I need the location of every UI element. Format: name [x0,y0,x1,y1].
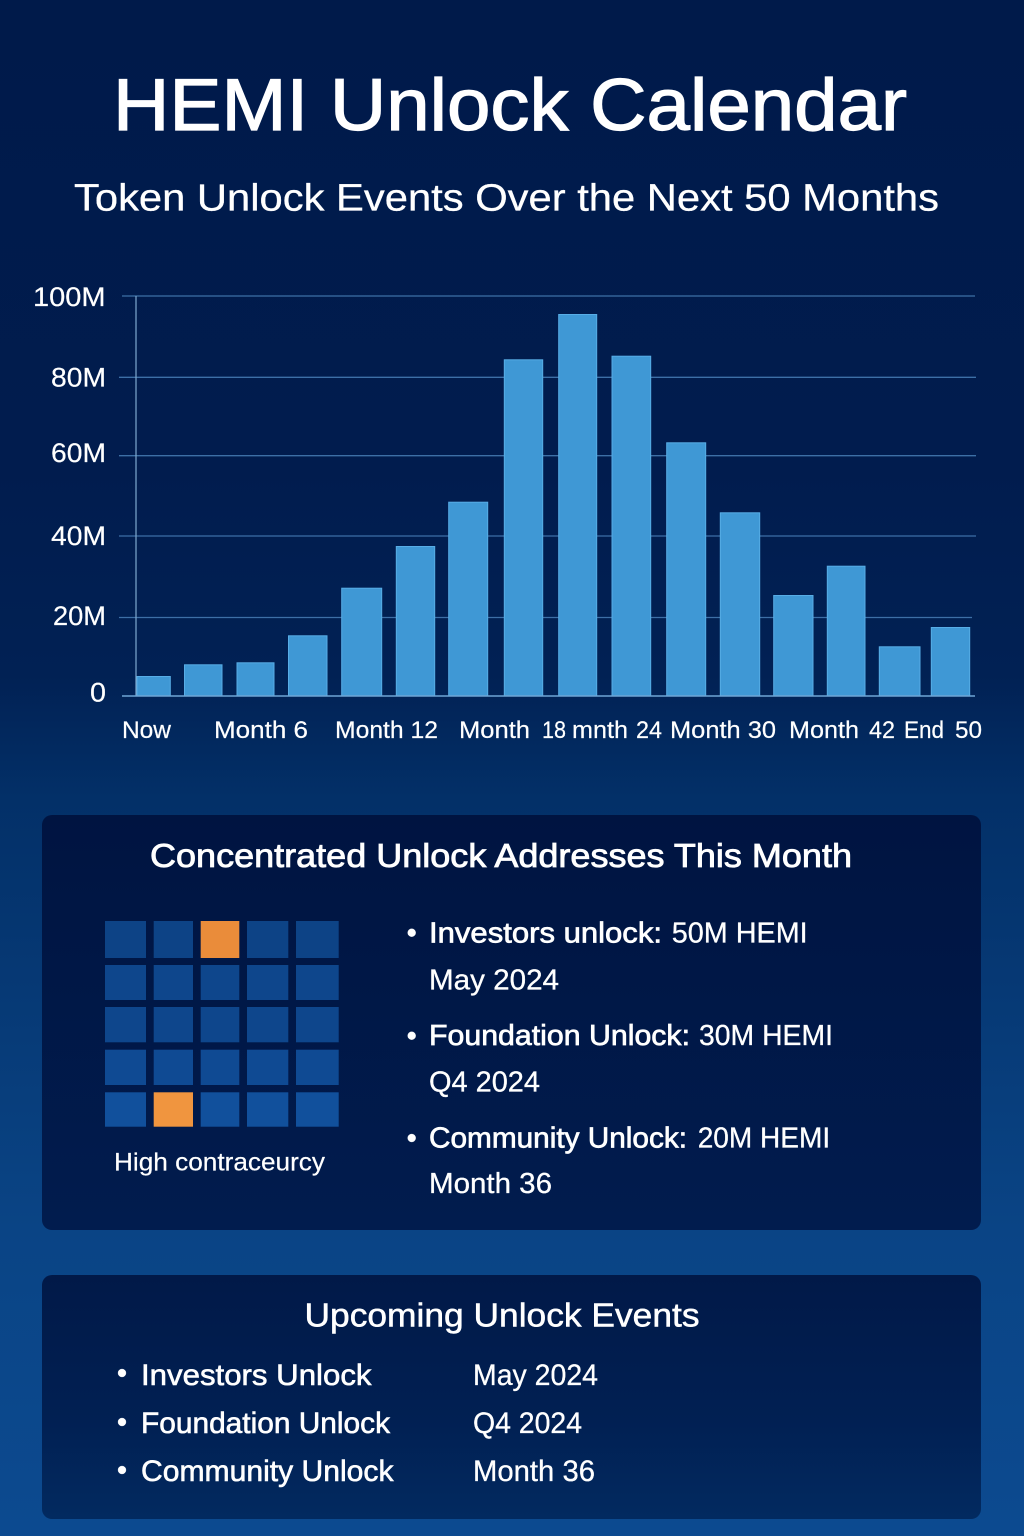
x axis labels: 50 [955,717,982,744]
grid caption: High contraceurcy [114,1149,326,1177]
events list: Month 36 [473,1455,595,1488]
x axis labels: 42 [869,717,895,744]
x axis labels: End [904,717,944,744]
panel: upcoming unlock events [42,1275,981,1519]
unlock list: May 2024 [429,964,559,996]
unlock list: Investors unlock: [429,918,662,950]
unlock list: Q4 2024 [429,1067,540,1099]
x axis labels: Month 12 [335,717,438,744]
events list: Community Unlock [141,1455,395,1488]
x axis labels: 24 [636,717,662,744]
title: HEMI Unlock Calendar [113,65,907,146]
bars [137,314,970,696]
x axis labels: 18 [542,717,566,744]
events list: Foundation Unlock [141,1407,391,1440]
y axis labels: 0 [90,678,106,708]
x axis labels: Month 30 [670,717,776,744]
events list: Q4 2024 [473,1407,582,1440]
y axis labels: 100M [33,282,106,312]
x axis labels [122,717,982,744]
unlock list: Month 36 [429,1168,552,1200]
y axis labels: 60M [51,438,106,468]
y axis labels: 80M [51,363,106,393]
panel heading: Upcoming Unlock Events [304,1297,700,1334]
x axis labels: Month 6 [214,717,308,744]
panel heading: Concentrated Unlock Addresses This Month [150,837,852,874]
highlighted cells [154,921,239,1127]
x axis labels: mnth [572,717,628,744]
panel: concentrated unlock addresses [42,815,981,1230]
unlock list: 30M HEMI [699,1020,833,1052]
events list: May 2024 [473,1359,598,1392]
events list [118,1359,598,1488]
x axis labels: Month [789,717,859,744]
unlock list [408,918,833,1200]
x axis labels: Month [459,717,530,744]
y axis labels [33,282,106,708]
y axis labels: 40M [51,521,106,551]
unlock list: 20M HEMI [698,1123,830,1155]
bar chart [33,282,982,744]
heatmap grid [105,921,339,1127]
subtitle: Token Unlock Events Over the Next 50 Months [74,178,939,220]
x axis labels: Now [122,717,172,744]
unlock list: Foundation Unlock: [429,1020,690,1052]
unlock list: 50M HEMI [672,918,808,950]
unlock list: Community Unlock: [429,1123,687,1155]
y axis labels: 20M [53,601,106,631]
events list: Investors Unlock [141,1359,373,1392]
